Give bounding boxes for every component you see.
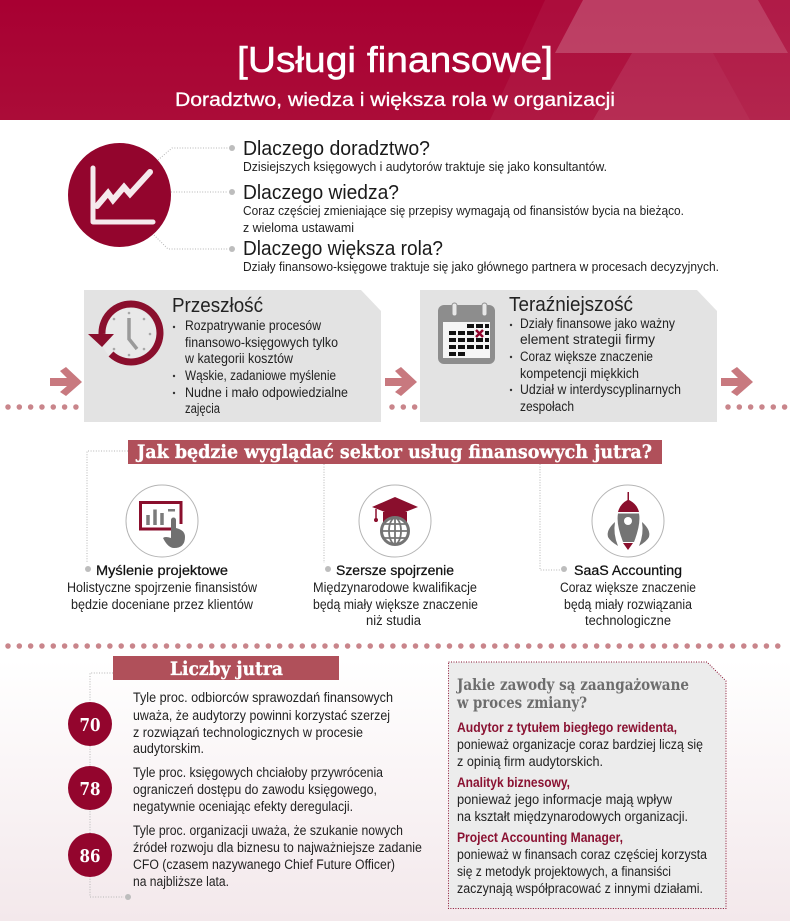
description: niż studia [366, 613, 421, 628]
panel heading [455, 675, 689, 712]
arrow: present to future [721, 367, 753, 396]
stat: 78: ograniczeń dostępu do zawodu księgowego, [133, 782, 377, 797]
stat: 70: z rozwiązań technologicznych w procesie [133, 725, 363, 740]
text block: why knowledge: z wieloma ustawami [243, 221, 354, 235]
bullet list: past: Rozpatrywanie procesów [185, 318, 321, 333]
column: project thinking [67, 485, 257, 612]
label: project thinking: Myślenie projektowe [96, 563, 228, 578]
dotted divider [8, 643, 786, 649]
bullet list: present: Coraz większe znaczenie [520, 349, 653, 364]
panel heading: Jakie zawody są zaangażowane [455, 675, 689, 694]
description [313, 580, 478, 628]
label: broader view: Szersze spojrzenie [336, 563, 454, 578]
stat: 86: CFO (czasem nazywanego Chief Future Officer) [133, 857, 395, 872]
bullet list: past: Wąskie, zadaniowe myślenie [185, 368, 336, 383]
page lower background [0, 660, 790, 921]
bullet list: present: Działy finansowe jako ważny [520, 316, 675, 331]
panel heading: w proces zmiany? [456, 693, 587, 712]
text block: why bigger role [243, 238, 719, 274]
profession: analyst [457, 775, 688, 824]
profession: auditor: Audytor z tytułem biegłego rewidenta, [457, 720, 677, 735]
title: [Usługi finansowe] [237, 39, 553, 80]
bullet list: present: zespołach [520, 399, 574, 414]
icon: rocket [592, 485, 664, 557]
stat: 78: 78 [80, 779, 100, 800]
bullet list: present [510, 316, 681, 414]
heading bar: numbers of tomorrow: Liczby jutra [170, 658, 283, 680]
profession: auditor: z opinią firm audytorskich. [457, 754, 603, 769]
bullet list: present: Udział w interdyscyplinarnych [520, 382, 681, 397]
stat: 86: źródeł rozwoju dla biznesu to najważniejsze zadanie [133, 840, 422, 855]
panel: present [420, 290, 717, 422]
description [67, 580, 257, 612]
description [560, 580, 696, 628]
profession: auditor: ponieważ organizacje coraz bardziej liczą się [457, 737, 703, 752]
profession: analyst: Analityk biznesowy, [457, 775, 570, 790]
icon: rising line chart in circle [68, 143, 171, 247]
profession: analyst: na kształt międzynarodowych organizacji. [457, 809, 688, 824]
bullet list: past: Nudne i mało odpowiedzialne [185, 385, 348, 400]
stat: 78: negatywnie oceniając efekty deregulacji. [133, 799, 353, 814]
profession: project accounting manager: się z metodyk projektowych, a finansiści [457, 864, 671, 879]
stat: 78: Tyle proc. księgowych chciałoby przywrócenia [133, 765, 383, 780]
heading bar: future sector: Jak będzie wyglądać sektor usług finansowych jutra? [135, 442, 652, 463]
profession: project accounting manager: ponieważ w finansach coraz częściej korzysta [457, 847, 707, 862]
heading: past: Przeszłość [172, 295, 263, 317]
text block: why bigger role: Działy finansowo-księgowe traktuje się jako głównego partnera w procesach decyzyjnych. [243, 260, 719, 274]
bullet list: present: element strategii firmy [520, 332, 655, 347]
label: SaaS accounting: SaaS Accounting [574, 563, 682, 578]
leader lines from heading bar [85, 451, 567, 572]
description: będą miały większe znaczenie [313, 597, 478, 612]
leader line for numbers [90, 673, 131, 900]
bullet list: present: kompetencji miękkich [520, 366, 639, 381]
dotted row left [8, 404, 78, 410]
text block: why knowledge: Dlaczego wiedza? [243, 182, 399, 204]
text block: why consulting [243, 138, 607, 174]
stat: 78 [68, 765, 383, 814]
panel: past [84, 290, 381, 422]
heading: present: Teraźniejszość [509, 294, 633, 316]
description: Międzynarodowe kwalifikacje [313, 580, 477, 595]
column: SaaS accounting [560, 485, 696, 628]
description: będzie doceniane przez klientów [71, 597, 253, 612]
stat: 70 [68, 690, 393, 756]
icon: graduation cap and globe [359, 485, 431, 557]
arrow: into past [50, 367, 82, 396]
leader lines from chart icon [154, 145, 235, 252]
text block: why knowledge [243, 182, 684, 235]
heading bar: numbers of tomorrow [113, 656, 339, 680]
profession: project accounting manager: zaczynają współpracować z innymi działami. [457, 881, 703, 896]
text block: why knowledge: Coraz częściej zmieniające się przepisy wymagają od finansistów bycia na bieżąco. [243, 204, 684, 218]
stat: 70: 70 [80, 715, 100, 736]
profession: project accounting manager [457, 830, 707, 896]
icon: calendar [438, 303, 495, 364]
profession: analyst: ponieważ jego informacje mają wpływ [457, 792, 672, 807]
header banner [0, 0, 790, 120]
description: technologiczne [585, 613, 671, 628]
dotted row middle [392, 404, 416, 410]
bullet list: past: finansowo-księgowych tylko [185, 335, 338, 350]
stat: 86: 86 [80, 846, 100, 867]
text block: why bigger role: Dlaczego większa rola? [243, 238, 443, 260]
subtitle: Doradztwo, wiedza i większa rola w organizacji [175, 90, 615, 111]
profession: auditor [457, 720, 703, 769]
stat: 70: uważa, że audytorzy powinni korzystać szerzej [133, 708, 390, 723]
text block: why consulting: Dzisiejszych księgowych i audytorów traktuje się jako konsultantów. [243, 160, 607, 174]
icon: clock with back arrow [88, 304, 160, 364]
description: będą miały rozwiązania [564, 597, 692, 612]
bullet list: past: w kategorii kosztów [184, 351, 293, 366]
arrow: past to present [385, 367, 417, 396]
profession: project accounting manager: Project Accounting Manager, [457, 830, 623, 845]
stat: 70: audytorskim. [133, 741, 204, 756]
panel: professions [448, 662, 726, 908]
bullet list: past [173, 318, 348, 416]
dotted row right [728, 404, 786, 410]
stat: 86 [68, 823, 422, 889]
description: Holistyczne spojrzenie finansistów [67, 580, 257, 595]
column: broader view [313, 485, 478, 628]
text block: why consulting: Dlaczego doradztwo? [243, 138, 430, 160]
stat: 70: Tyle proc. odbiorców sprawozdań finansowych [133, 690, 393, 705]
icon: touch screen chart [126, 485, 198, 557]
stat: 86: Tyle proc. organizacji uważa, że szukanie nowych [133, 823, 403, 838]
description: Coraz większe znaczenie [560, 580, 696, 595]
bullet list: past: zajęcia [185, 401, 220, 416]
stat: 86: na najbliższe lata. [133, 874, 229, 889]
